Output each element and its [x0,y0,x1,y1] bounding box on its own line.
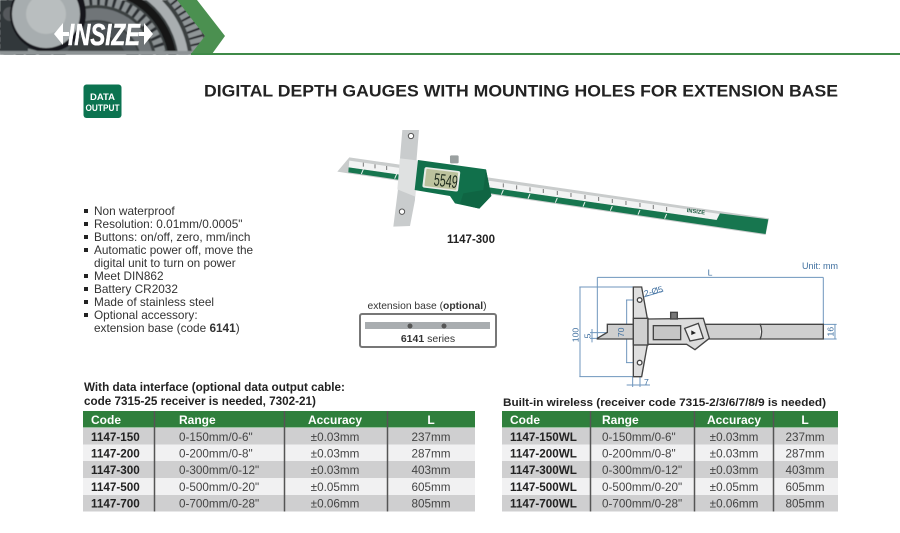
table: data interface: 0-300mm/0-12" [179,464,259,477]
table: built-in wireless [502,411,838,512]
feature list: Made of stainless steel [94,295,214,309]
table: built-in wireless: 0-700mm/0-28" [602,498,682,510]
table: built-in wireless: L [801,413,809,427]
digital display unit [415,160,491,209]
logo: INSIZE: INSIZE [68,17,141,52]
header photo: machinery [0,0,205,55]
extension base callout [360,301,496,347]
table: data interface: 0-700mm/0-28" [179,498,259,510]
badge: data output [84,84,122,118]
table: built-in wireless: 1147-200WL [510,448,577,460]
table: built-in wireless: 0-500mm/0-20" [602,481,682,494]
table: built-in wireless: ±0.05mm [710,481,758,494]
table: data interface: Accuracy [308,413,362,427]
extension base callout: extension base (optional) [367,301,487,312]
table: data interface: 805mm [412,498,450,510]
table: data interface: ±0.05mm [311,481,359,494]
table: data interface: ±0.06mm [311,498,359,510]
dimension lines [579,277,837,387]
table: built-in wireless: 403mm [786,464,824,477]
header banner [0,0,900,55]
dimension labels: 70 [616,327,626,337]
table: built-in wireless: ±0.06mm [710,498,758,510]
table: data interface: 1147-150 [91,431,140,444]
table: data interface: 1147-500 [91,481,140,494]
table heading: built-in wireless: Built-in wireless (receiver code 7315-2/3/6/7/8/9 is needed) [503,397,826,409]
table: data interface: ±0.03mm [311,431,359,444]
badge: data output: OUTPUT [86,103,120,114]
feature list: Meet DIN862 [94,269,164,283]
table heading: data interface: code 7315-25 receiver is needed, 7302-21) [84,395,316,408]
badge: data output: DATA [90,92,115,103]
table: data interface: 0-150mm/0-6" [179,431,253,444]
table: built-in wireless: 605mm [786,481,824,494]
table: data interface: 403mm [412,464,450,477]
table: data interface: 0-500mm/0-20" [179,481,259,494]
table: built-in wireless: ±0.03mm [710,448,758,460]
table: built-in wireless: Code [510,413,540,427]
table: built-in wireless: 0-200mm/0-8" [602,448,676,460]
product photo: digital depth gauge [337,130,769,235]
table: built-in wireless: 1147-300WL [510,464,577,477]
table: built-in wireless: 805mm [786,498,824,510]
table: built-in wireless: Range [602,413,639,427]
feature list [84,204,254,335]
table: data interface: 605mm [412,481,450,494]
table: data interface: 1147-700 [91,498,140,510]
technical drawing [570,268,837,387]
table: built-in wireless: 0-150mm/0-6" [602,431,676,444]
dimension labels [570,268,835,387]
dimension labels: 7 [644,377,649,387]
table: data interface [83,411,475,512]
dimension labels: 100 [570,328,580,342]
dimension labels: 2-Ø5 [643,284,664,299]
table: built-in wireless: 1147-500WL [510,481,577,494]
feature list: Resolution: 0.01mm/0.0005" [94,217,242,231]
dimension labels: 16 [825,327,835,336]
feature list: Automatic power off, move the [94,243,254,257]
feature list: Buttons: on/off, zero, mm/inch [94,230,250,244]
table: data interface: Range [179,413,216,427]
table: built-in wireless: ±0.03mm [710,431,758,444]
table: built-in wireless: 1147-150WL [510,431,577,444]
table: built-in wireless: 287mm [786,448,824,460]
header green chevron [177,0,225,54]
ruler body: INSIZE [686,208,705,217]
feature list: digital unit to turn on power [94,256,236,270]
table: data interface: ±0.03mm [311,448,359,460]
extension base callout: 6141 series [401,333,455,345]
table: data interface: 0-200mm/0-8" [179,448,253,460]
gauge outline [597,287,823,377]
dimension labels: L [708,268,713,278]
table: built-in wireless: Accuracy [707,413,761,427]
title: DIGITAL DEPTH GAUGES WITH MOUNTING HOLES FOR EXTENSION BASE [204,82,838,100]
table: built-in wireless: 237mm [786,431,824,444]
table: data interface: L [427,413,435,427]
table: built-in wireless: 0-300mm/0-12" [602,464,682,477]
digital display unit: 5549 [433,170,459,192]
table: data interface: ±0.03mm [311,464,359,477]
table: data interface: 237mm [412,431,450,444]
header rule [191,53,900,55]
unit note: Unit: mm [802,261,838,271]
feature list: extension base (code 6141) [94,321,240,335]
table heading: data interface [84,381,345,408]
table: data interface: Code [91,413,121,427]
feature list: Optional accessory: [94,308,198,322]
ruler body [337,157,769,235]
table: built-in wireless: ±0.03mm [710,464,758,477]
table: built-in wireless: 1147-700WL [510,498,577,510]
table heading: data interface: With data interface (optional data output cable: [84,381,345,394]
depth base [393,130,419,227]
table: data interface: 1147-200 [91,448,140,460]
feature list: Battery CR2032 [94,282,178,296]
feature list: Non waterproof [94,204,175,218]
dimension labels: 5 [583,333,593,338]
thumb wheel [450,155,459,163]
table: data interface: 287mm [412,448,450,460]
product code label: 1147-300 [447,234,495,246]
table: data interface: 1147-300 [91,464,140,477]
